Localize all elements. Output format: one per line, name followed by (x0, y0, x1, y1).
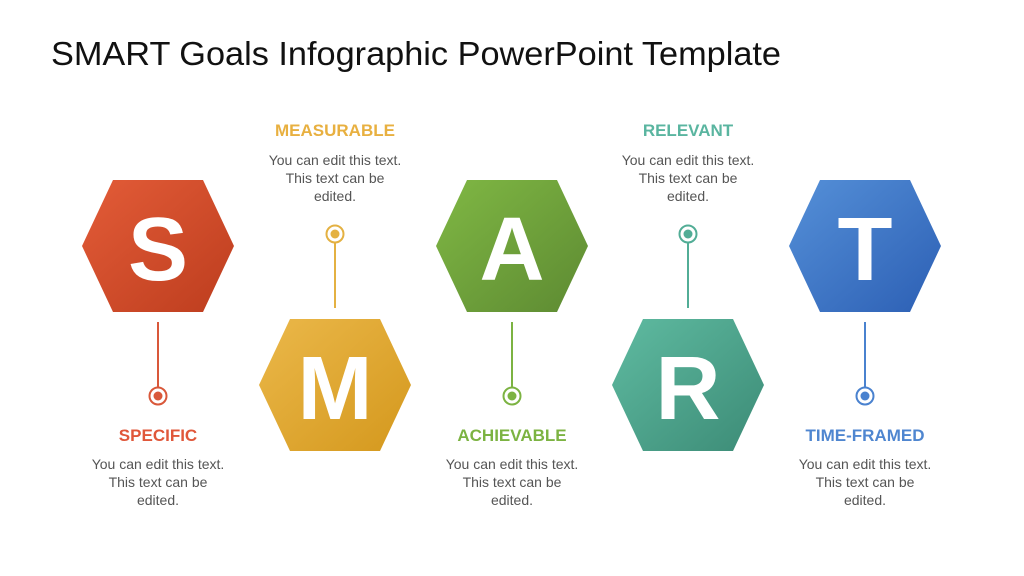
label R: This text can be (639, 170, 738, 186)
label R: edited. (667, 188, 709, 204)
hexagon M (259, 319, 411, 451)
label S: edited. (137, 492, 179, 508)
connector T (856, 322, 874, 404)
connector A (504, 322, 520, 404)
hexagon R (612, 319, 764, 451)
label R: RELEVANT (643, 121, 734, 140)
label M: You can edit this text. (269, 152, 401, 168)
hexagon R: R (656, 339, 720, 439)
hexagon S (82, 180, 234, 312)
label M: This text can be (286, 170, 385, 186)
label M: edited. (314, 188, 356, 204)
label R: You can edit this text. (622, 152, 754, 168)
label T (799, 426, 931, 508)
label T: You can edit this text. (799, 456, 931, 472)
label M (269, 121, 401, 204)
connector M (326, 226, 344, 308)
label R (622, 121, 754, 204)
label S: This text can be (109, 474, 208, 490)
hexagon A: A (480, 200, 544, 300)
label A: You can edit this text. (446, 456, 578, 472)
label A (446, 426, 578, 508)
label T: TIME-FRAMED (806, 426, 924, 445)
step A: achievable (436, 180, 588, 508)
title: SMART Goals Infographic PowerPoint Template (51, 35, 781, 72)
step R: relevant (612, 121, 764, 451)
label T: This text can be (816, 474, 915, 490)
hexagon M: M (298, 339, 372, 439)
label A: ACHIEVABLE (457, 426, 567, 445)
step S: specific (82, 180, 234, 508)
label A: This text can be (463, 474, 562, 490)
hexagon A (436, 180, 588, 312)
label T: edited. (844, 492, 886, 508)
label A: edited. (491, 492, 533, 508)
hexagon S: S (128, 200, 188, 300)
step M: measurable (259, 121, 411, 451)
label M: MEASURABLE (275, 121, 395, 140)
step T: time-framed (789, 180, 941, 508)
label S (92, 426, 224, 508)
connector S (150, 322, 166, 404)
hexagon T (789, 180, 941, 312)
connector R (680, 226, 696, 308)
hexagon T: T (838, 200, 893, 300)
label S: SPECIFIC (119, 426, 197, 445)
label S: You can edit this text. (92, 456, 224, 472)
